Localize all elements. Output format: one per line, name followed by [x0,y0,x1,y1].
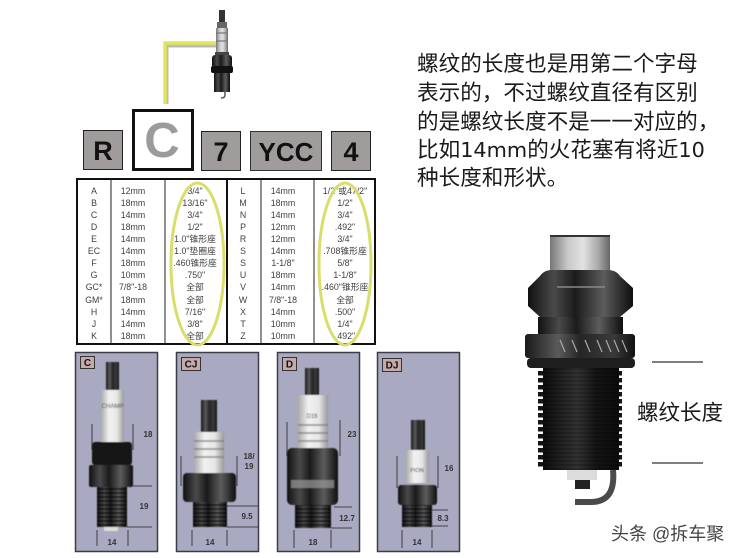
panel: plug type CJ: 9.5 [241,512,253,521]
table column: codes right: S [240,258,246,268]
panel: plug type CJ: CJ [185,360,197,370]
table column: thread reach right [322,185,369,341]
explanatory text: 比如14mm的火花塞有将近10 [417,136,705,162]
explanatory text [417,50,719,190]
table column: codes left: GC* [86,282,103,292]
table column: thread diameter left [119,186,147,341]
table column: thread reach left: .750" [185,270,205,280]
thread length label: 螺纹长度 [637,401,723,425]
panel: plug type CJ [176,352,258,552]
table column: thread reach right: .492" [335,222,355,232]
panel: plug type D: 12.7 [339,514,355,523]
table column: thread diameter right: 14mm [271,246,295,256]
explanatory text: 种长度和形状。 [417,164,568,190]
thread length upper marker [652,361,703,363]
code digit 7: 7 [213,137,229,167]
panel: plug type CJ: 14 [206,538,215,547]
table column: codes right [239,186,248,341]
panel: plug type C: 18 [144,430,153,439]
explanatory text: 的是螺纹长度不是一一对应的， [417,104,719,136]
code letter R: R [93,136,113,166]
panel: plug type D: D [286,360,293,370]
table column: thread diameter left: 14mm [121,319,145,329]
table column: codes right: N [240,210,246,220]
table column: thread reach right: .460"锥形座 [322,281,369,292]
table column: thread diameter left: 18mm [121,295,145,305]
table column: codes right: L [241,186,246,196]
table column: thread reach right: .492" [335,331,355,341]
table column: codes right: Z [240,331,246,341]
panel: plug type CJ: 18/ [243,452,255,461]
table column: codes right: S [240,246,246,256]
table column: codes left: A [91,186,97,196]
table column: thread diameter right: 14mm [271,186,295,196]
table column: thread reach left: 7/16" [185,307,205,317]
table column: thread reach left: 1.0"锥形座 [174,233,216,244]
panel: plug type DJ: PION [410,468,424,474]
table column: thread diameter right: 10mm [271,331,295,341]
table column: thread reach left: 13/16" [182,198,208,208]
table column: codes left [85,186,103,341]
code digit 7 [202,132,240,170]
table column: thread diameter right [269,186,297,341]
table column: thread reach left: 全部 [186,330,204,341]
table column: thread diameter right: 14mm [271,282,295,292]
table column: thread diameter left: 14mm [121,307,145,317]
table column: thread diameter right: 1-1/8" [271,258,295,268]
explanatory text: 螺纹的长度也是用第二个字母 [417,50,698,76]
table column: thread diameter left: 18mm [121,198,145,208]
table column: thread reach left: .460锥形座 [173,257,217,268]
panel: plug type C: 19 [140,502,149,511]
table column: thread diameter right: 18mm [271,270,295,280]
panel: plug type C: CHAMP [102,404,123,410]
table column: thread diameter left: 18mm [121,331,145,341]
table column: thread reach left [173,186,217,341]
table column: codes right: X [240,307,246,317]
table column: thread reach right: 1/2"或47/2" [323,185,367,196]
table column: thread diameter right: 18mm [271,198,295,208]
panel: plug type D [278,352,360,552]
yellow connector line [165,43,216,104]
table column: codes right: T [240,319,246,329]
table column: thread reach left: 1.0"垫圈座 [174,245,216,256]
table column: codes right: R [240,234,246,244]
table column: codes right: P [240,222,246,232]
table column: thread diameter right: 12mm [271,234,295,244]
table column: thread diameter left: 10mm [121,270,145,280]
highlight ellipse right [319,183,371,345]
table column: codes left: J [92,319,96,329]
table column: thread diameter right: 7/8"-18 [269,295,297,305]
thread length lower marker [652,462,703,464]
table column: thread reach left: 3/4" [187,210,203,220]
code letter C highlighted: C [144,114,180,168]
panel: plug type DJ: 14 [413,538,422,547]
table column: codes left: E [91,234,97,244]
table column: thread diameter left: 14mm [121,210,145,220]
table column: thread reach right: .708锥形座 [323,245,367,256]
table column: thread diameter right: 12mm [271,222,295,232]
panel: plug type C: 14 [108,538,117,547]
table column: thread diameter left: 14mm [121,234,145,244]
table column: codes left: K [91,331,97,341]
code letter C highlighted [134,110,192,170]
table column: thread reach left: 全部 [186,281,204,292]
table column: codes left: GM* [85,295,103,305]
table column: thread reach left: 3/8" [187,319,203,329]
panel: plug type DJ: DJ [386,360,398,372]
table column: thread reach left: 1/2" [187,222,203,232]
table column: thread diameter right: 14mm [271,307,295,317]
table column: thread reach right: 1-1/8" [333,270,357,280]
table column: thread diameter right: 14mm [271,210,295,220]
table column: codes right: V [240,282,246,292]
panel: plug type D: 18 [309,538,318,547]
panel: plug type DJ [378,352,460,552]
panel: plug type DJ: 16 [445,464,454,473]
code digit 4 [332,132,370,170]
code letters YCC [250,132,322,170]
code letter R [84,130,122,170]
table column: thread reach right: 5/8" [337,258,353,268]
table column: codes left: B [91,198,97,208]
table column: thread reach right: .500" [335,307,355,317]
table column: codes left: G [91,270,98,280]
panel: plug type D: 23 [348,430,357,439]
table column: codes left: C [91,210,98,220]
table column: codes left: F [91,258,97,268]
code digit 4: 4 [343,137,359,167]
table column: thread reach right: 1/4" [337,319,353,329]
table column: codes right: U [240,270,246,280]
panel: plug type DJ: 8.3 [437,514,449,523]
reach code table [77,179,375,344]
table column: thread reach right: 1/2" [337,198,353,208]
table column: thread diameter left: 12mm [121,186,145,196]
table column: thread reach right: 3/4" [337,210,353,220]
panel: plug type C [76,352,158,552]
table column: codes left: H [91,307,97,317]
explanatory text: 表示的，不过螺纹直径有区别 [417,76,698,106]
table column: thread diameter left: 7/8"-18 [119,282,147,292]
table column: thread reach left: 3/4" [187,186,203,196]
table column: codes right: M [239,198,247,208]
code letters YCC: YCC [259,137,314,167]
table column: thread diameter left: 18mm [121,222,145,232]
watermark: 头条 @拆车聚 [611,524,724,544]
panel: plug type C: C [84,358,91,369]
highlight ellipse left [171,183,224,345]
spark plug top icon [211,10,233,98]
table column: codes right: W [239,295,248,305]
table column: codes left: D [91,222,97,232]
table column: thread reach left: 全部 [186,294,204,305]
table column: thread reach right: 3/4" [337,234,353,244]
panel: plug type CJ: 19 [245,462,254,471]
table column: thread reach right: 全部 [336,294,354,305]
table column: thread diameter left: 14mm [121,246,145,256]
panel: plug type D: D16 [306,414,318,420]
table column: thread diameter right: 10mm [271,319,295,329]
table column: thread diameter left: 18mm [121,258,145,268]
large spark plug photo [525,236,635,502]
table column: codes left: EC [88,246,101,256]
